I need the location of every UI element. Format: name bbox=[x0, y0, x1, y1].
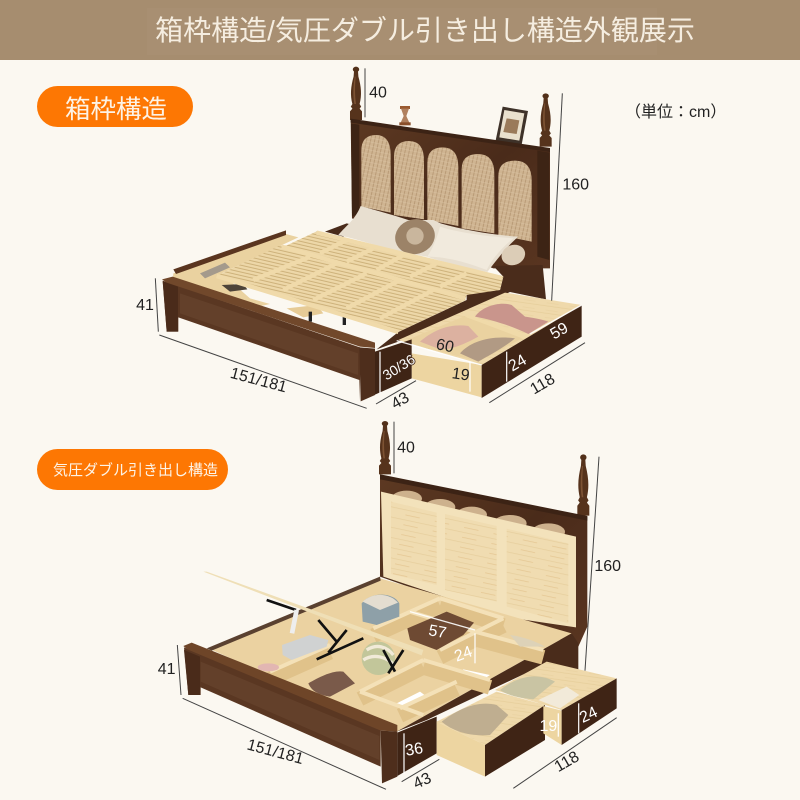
section badge: box frame: 箱枠構造 bbox=[65, 96, 167, 124]
bed 2 dimensions: 57 bbox=[427, 622, 448, 642]
section badge: gas lift bbox=[37, 449, 228, 490]
section badge: gas lift: 気圧ダブル引き出し構造 bbox=[53, 462, 218, 479]
drawer front panels bbox=[412, 305, 582, 398]
pillows bbox=[338, 206, 528, 272]
bed 1 dimensions: 24 bbox=[506, 352, 530, 375]
compartment divider walls bbox=[270, 606, 543, 716]
bed 1: box frame bed with slats bbox=[136, 67, 589, 413]
bed 2 dimensions: 160 bbox=[594, 558, 621, 575]
right side rail bbox=[377, 265, 546, 349]
headboard panel bbox=[351, 119, 550, 268]
unit note: （単位：cm） bbox=[625, 104, 726, 121]
bed 2 dimensions: 24 bbox=[577, 704, 601, 727]
headboard bbox=[380, 474, 587, 647]
stored items bbox=[258, 595, 545, 697]
bed 1 dimensions: 19 bbox=[451, 365, 471, 385]
dimension guide lines bbox=[155, 68, 585, 408]
bed 1 dimensions: 30/36 bbox=[380, 351, 418, 383]
bed 1 dimensions bbox=[136, 84, 589, 413]
bed 2 dimensions: 19 bbox=[539, 718, 557, 735]
front drawer bbox=[437, 692, 545, 777]
bed 2 dimensions: 43 bbox=[411, 770, 434, 793]
bed 1 dimensions: 151/181 bbox=[228, 365, 289, 396]
bed 2 dimensions: 24 bbox=[452, 643, 475, 665]
bed 1 dimensions: 40 bbox=[369, 84, 387, 101]
hourglass ornament bbox=[399, 106, 411, 125]
white interior dimension lines bbox=[380, 305, 582, 393]
right side rail bbox=[397, 633, 578, 732]
picture frame ornament bbox=[496, 107, 528, 145]
wood backing panel bbox=[381, 492, 576, 627]
header title: 箱枠構造/気圧ダブル引き出し構造外観展示 bbox=[155, 15, 695, 46]
bed 1 dimensions: 41 bbox=[136, 297, 154, 314]
back left deck corner bbox=[325, 223, 360, 237]
dimension guide lines bbox=[177, 422, 617, 789]
footboard frame bbox=[162, 277, 412, 401]
left headboard post bbox=[379, 421, 391, 474]
gas lift panel edge and struts bbox=[203, 572, 423, 673]
section badge: box frame bbox=[37, 86, 193, 127]
bed 2 dimensions: 40 bbox=[397, 440, 415, 457]
bed 1 dimensions: 43 bbox=[388, 389, 412, 413]
bed 2 dimensions bbox=[158, 440, 621, 793]
bed 2 dimensions: 118 bbox=[552, 748, 582, 776]
support legs under slats bbox=[309, 312, 346, 325]
bed 2: gas lift bed with drawers bbox=[158, 421, 621, 793]
white interior dimension lines bbox=[404, 612, 579, 774]
header band bbox=[0, 0, 800, 60]
bed 2 dimensions: 151/181 bbox=[245, 737, 305, 768]
drawer interior bbox=[398, 293, 582, 365]
left headboard post bbox=[350, 67, 362, 120]
right headboard post bbox=[540, 93, 552, 147]
left side storage rail and interior bbox=[173, 230, 323, 317]
bed 1 dimensions: 59 bbox=[547, 320, 571, 343]
right headboard post bbox=[577, 454, 589, 516]
storage box interior bbox=[207, 577, 572, 732]
foldable slat bed base bbox=[217, 231, 503, 332]
bed 1 dimensions: 160 bbox=[562, 176, 589, 193]
bed 1 dimensions: 60 bbox=[434, 336, 456, 356]
back drawer bbox=[495, 662, 617, 745]
footboard bbox=[183, 643, 437, 783]
bed 2 dimensions: 41 bbox=[158, 661, 176, 678]
compartment divider tops bbox=[270, 598, 543, 715]
bed 1 dimensions: 118 bbox=[527, 371, 558, 398]
bed 2 dimensions: 36 bbox=[404, 740, 425, 760]
